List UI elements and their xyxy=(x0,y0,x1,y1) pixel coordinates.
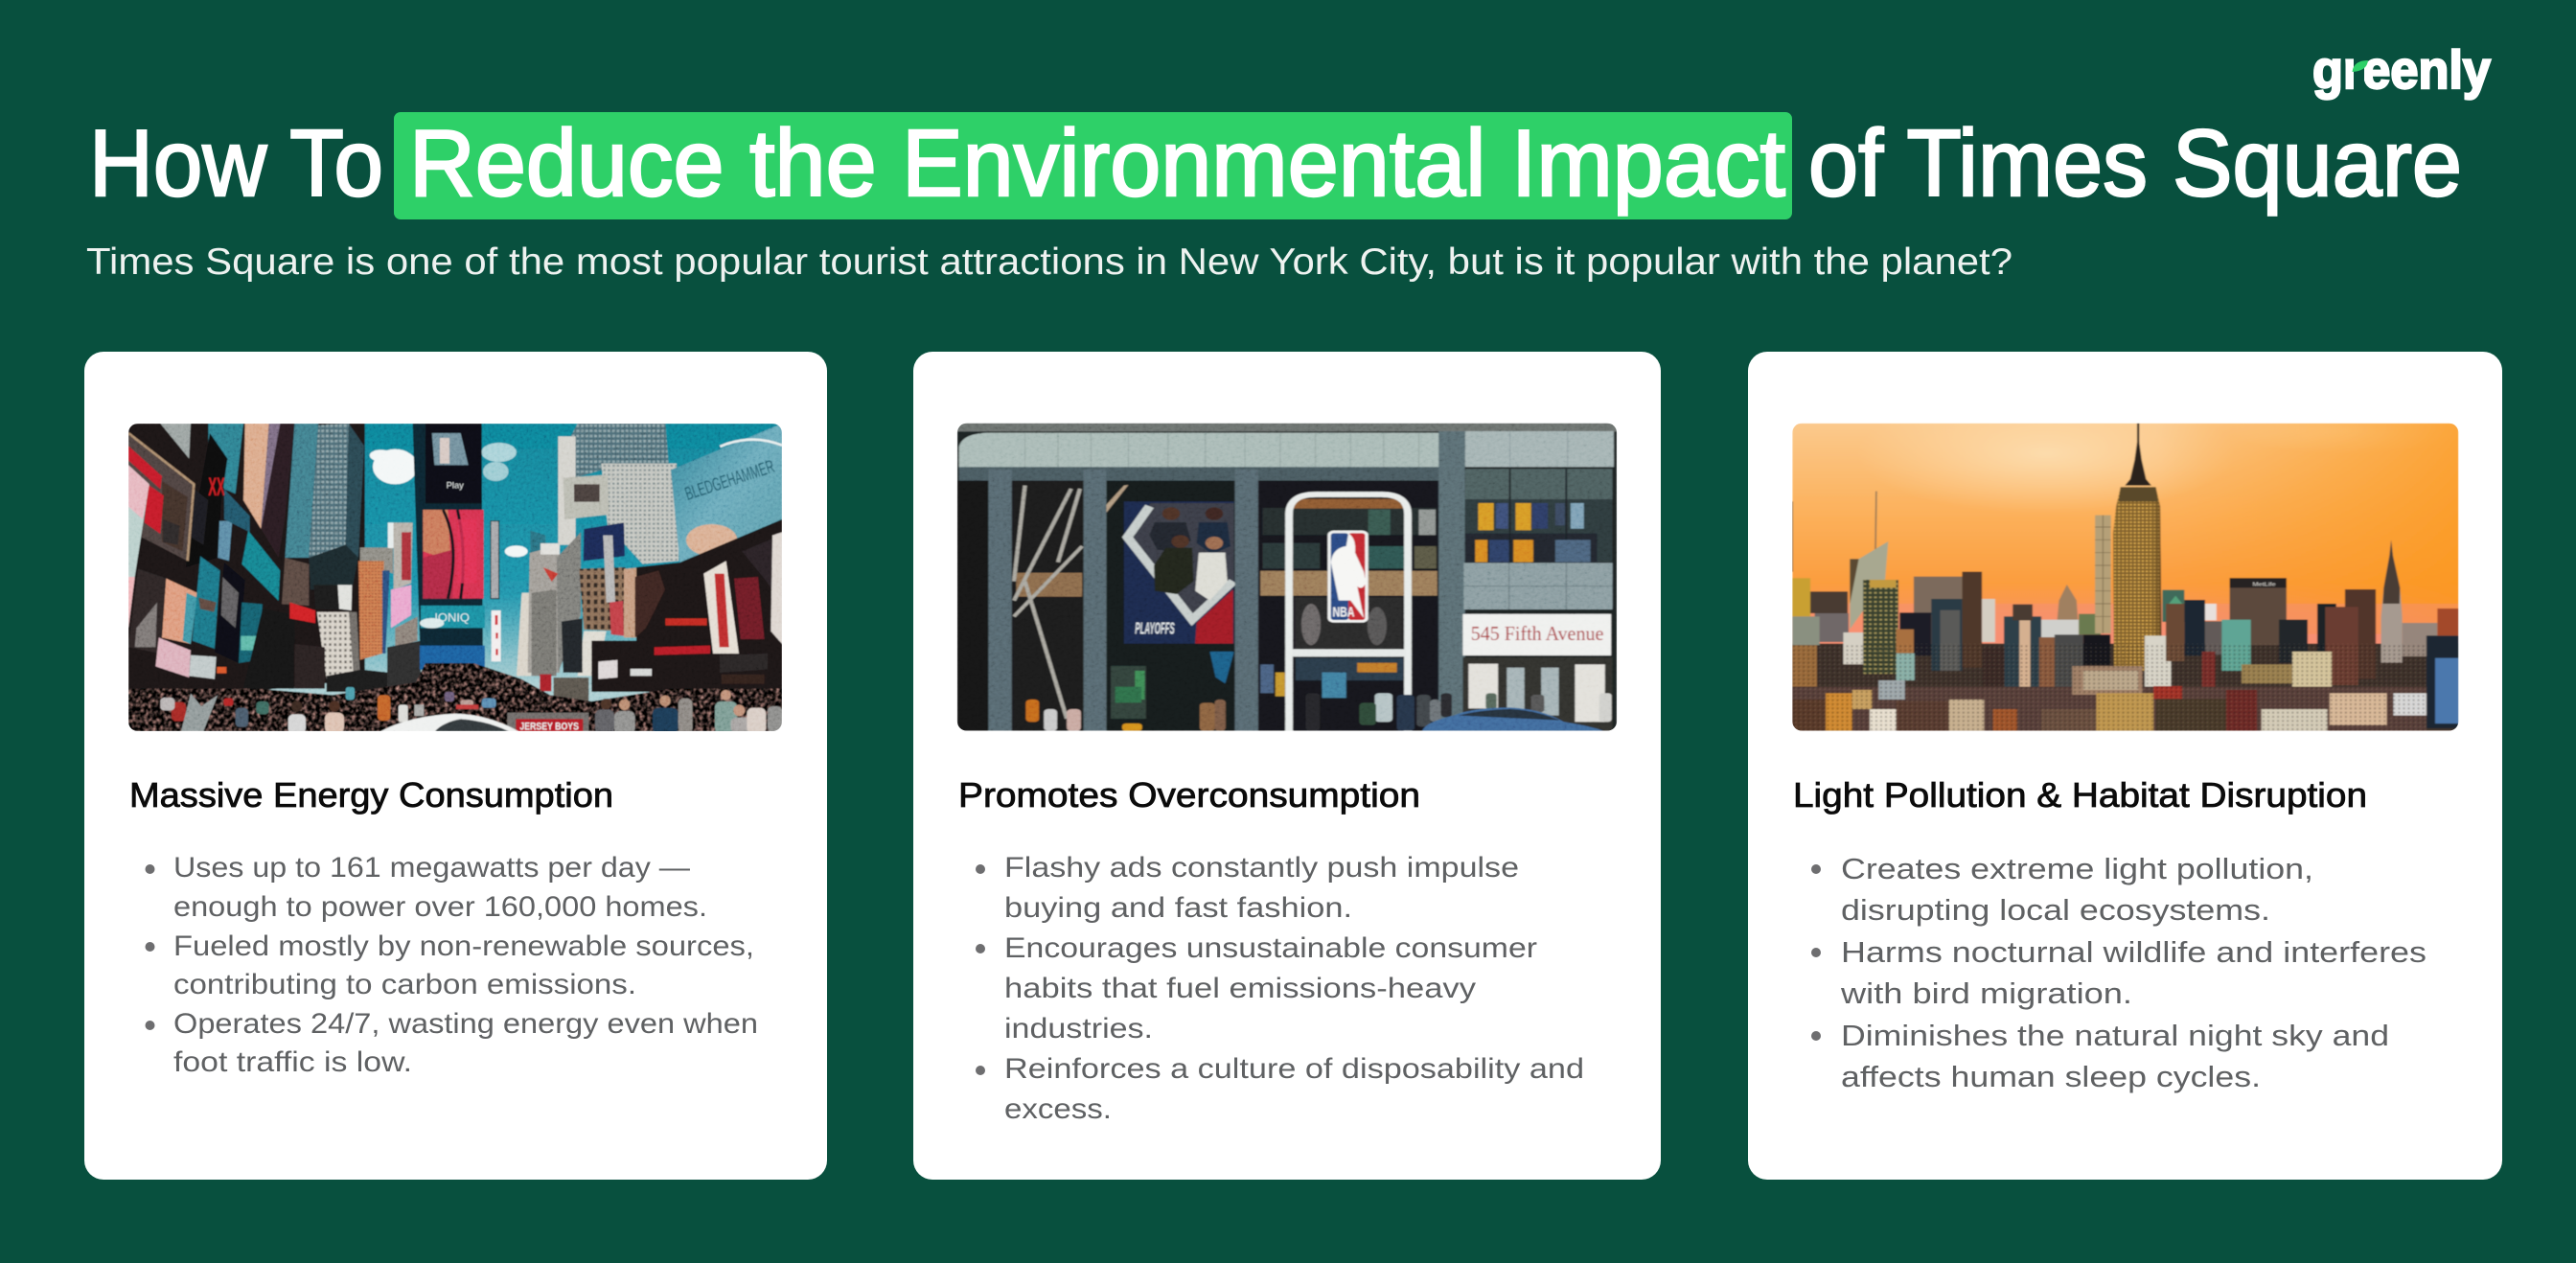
photo: Manhattan skyline at sunset xyxy=(1792,424,2459,731)
photo: NBA store on Fifth Avenue: PLAYOFFS xyxy=(1135,620,1175,638)
photo: Times Square billboards and crowd: Play xyxy=(447,481,464,491)
NBA logo: NBA xyxy=(1333,604,1355,620)
greenly logo: greenly xyxy=(2312,39,2491,100)
crowd xyxy=(128,663,782,733)
photo: NBA store on Fifth Avenue xyxy=(956,424,1618,731)
bullet list: Encourages unsustainable consumer xyxy=(1004,932,1537,964)
bullet list: Operates 24/7, wasting energy even when xyxy=(173,1008,758,1040)
bullet list: Fueled mostly by non-renewable sources, xyxy=(173,930,754,962)
panel: massive energy consumption xyxy=(84,352,827,1180)
panel: promotes overconsumption xyxy=(913,352,1661,1180)
title: Reduce the Environmental Impact xyxy=(409,110,1785,216)
bullet list: affects human sleep cycles. xyxy=(1841,1060,2261,1093)
subtitle: Times Square is one of the most popular tourist attractions in New York City, but is it popular with the planet? xyxy=(86,241,2012,283)
bullet list: Uses up to 161 megawatts per day — xyxy=(173,852,690,884)
bullet list: enough to power over 160,000 homes. xyxy=(173,891,707,923)
bullet list: Creates extreme light pollution, xyxy=(1841,852,2313,885)
basketball players xyxy=(1149,507,1230,601)
bullet list: disrupting local ecosystems. xyxy=(1841,893,2270,927)
photo: Times Square billboards and crowd: JERSEY BOYS xyxy=(519,721,579,732)
bullet list xyxy=(146,852,758,1078)
heading: Promotes Overconsumption xyxy=(958,775,1420,815)
photo: Times Square billboards and crowd xyxy=(128,424,782,731)
photo: Times Square billboards and crowd: IONIQ xyxy=(434,611,470,625)
panel: light pollution and habitat disruption xyxy=(1748,352,2502,1180)
title xyxy=(89,110,2462,219)
heading: Massive Energy Consumption xyxy=(129,775,613,815)
bullet list xyxy=(1811,852,2426,1093)
photo: Times Square billboards and crowd: XX xyxy=(208,472,225,501)
title highlight xyxy=(394,112,1792,219)
heading: Light Pollution & Habitat Disruption xyxy=(1793,775,2367,815)
bullet list: Diminishes the natural night sky and xyxy=(1841,1019,2389,1052)
NBA logo xyxy=(1327,531,1368,623)
title: of Times Square xyxy=(1808,110,2462,216)
bullet list xyxy=(976,852,1584,1125)
bullet list: contributing to carbon emissions. xyxy=(173,969,636,1000)
title: How To xyxy=(89,110,383,216)
Chrysler Building xyxy=(2381,540,2403,663)
bullet list: Flashy ads constantly push impulse xyxy=(1004,852,1519,884)
bullet list: habits that fuel emissions-heavy xyxy=(1004,973,1476,1004)
Empire State Building xyxy=(2113,424,2162,671)
bullet list: excess. xyxy=(1004,1093,1112,1125)
photo: Manhattan skyline at sunset: MetLife xyxy=(2253,582,2276,587)
bullet list: foot traffic is low. xyxy=(173,1046,412,1078)
bullet list: Reinforces a culture of disposability and xyxy=(1004,1053,1584,1085)
bullet list: Harms nocturnal wildlife and interferes xyxy=(1841,935,2426,969)
bullet list: with bird migration. xyxy=(1840,976,2132,1010)
bullet list: buying and fast fashion. xyxy=(1004,892,1352,924)
bullet list: industries. xyxy=(1004,1013,1153,1045)
